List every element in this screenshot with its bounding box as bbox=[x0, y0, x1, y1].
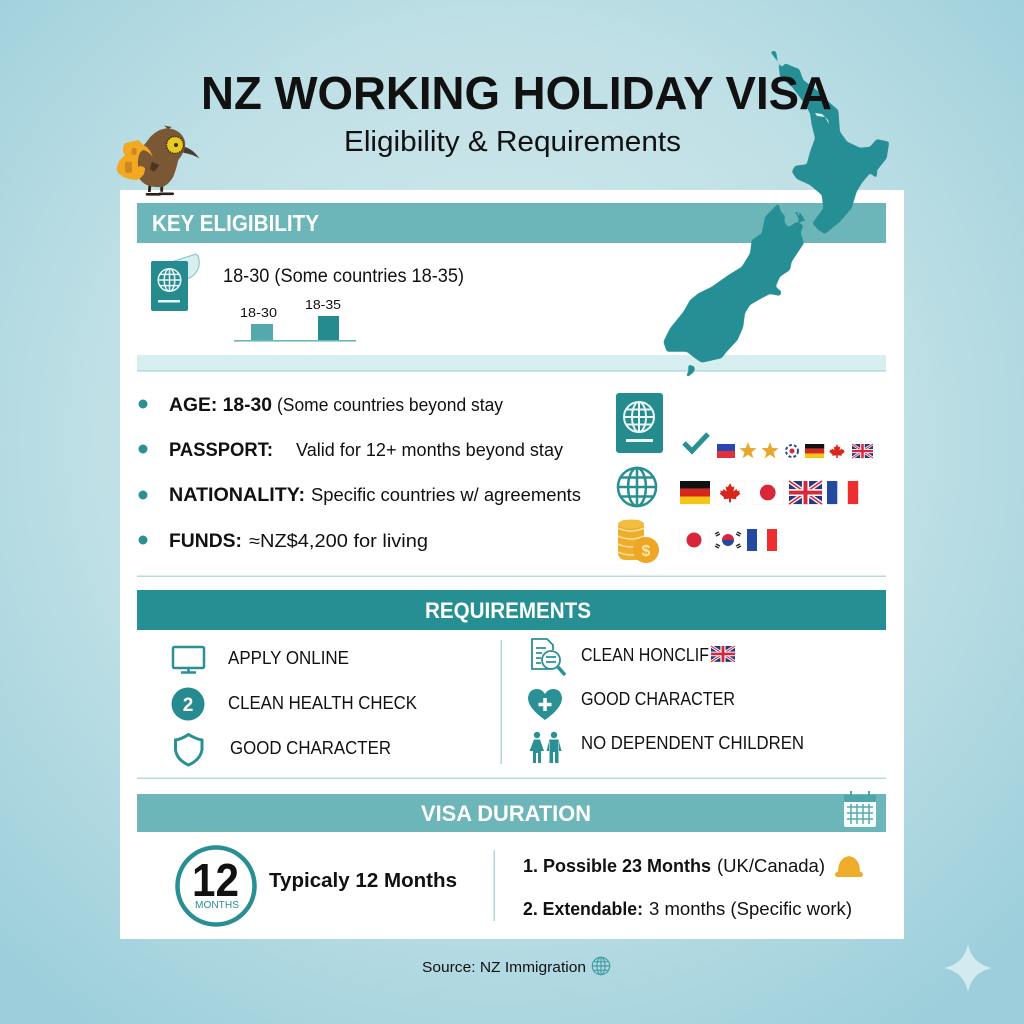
icon: hard hat bbox=[835, 856, 863, 877]
possible 23 months: 1. Possible 23 Months bbox=[523, 856, 711, 876]
flags row 1 bbox=[717, 442, 873, 458]
bullet: passport: Valid for 12+ months beyond stay bbox=[296, 440, 563, 460]
good character: GOOD CHARACTER bbox=[230, 738, 391, 758]
panel: eligibility list bbox=[138, 395, 581, 552]
icon: passport bbox=[616, 393, 663, 453]
extendable: 3 months (Specific work) bbox=[649, 899, 852, 919]
badge: 12 months: 12 bbox=[192, 854, 239, 906]
icon: people bbox=[530, 732, 562, 763]
bar chart: age ranges bbox=[234, 297, 356, 342]
bullet: age bbox=[138, 395, 503, 416]
vertical divider bbox=[494, 850, 495, 921]
typically 12 months: Typicaly 12 Months bbox=[269, 870, 457, 892]
subtitle: Eligibility & Requirements bbox=[344, 126, 681, 158]
bullet: nationality: Specific countries w/ agreements bbox=[311, 485, 581, 505]
flag: UK bbox=[711, 646, 735, 662]
divider bbox=[137, 778, 886, 779]
bullet: nationality: NATIONALITY: bbox=[169, 485, 305, 506]
icon: number 2: 2 bbox=[183, 695, 193, 716]
pale divider band bbox=[137, 355, 886, 371]
icon: coins bbox=[618, 520, 659, 563]
vertical divider bbox=[500, 640, 502, 764]
icon: check mark bbox=[684, 434, 708, 451]
badge: 12 months: MONTHS bbox=[195, 900, 239, 911]
icon: passport with ticket bbox=[151, 254, 199, 311]
age range text: 18-30 (Some countries 18-35) bbox=[223, 266, 464, 287]
map: New Zealand bbox=[663, 51, 889, 377]
source: Source: NZ Immigration bbox=[422, 959, 586, 976]
key eligibility heading: KEY ELIGIBILITY bbox=[152, 210, 319, 236]
bullet: nationality bbox=[138, 485, 581, 506]
flags row 3 bbox=[679, 529, 777, 551]
extendable bbox=[523, 899, 852, 919]
clean honclif: CLEAN HONCLIF bbox=[581, 645, 709, 665]
apply online: APPLY ONLINE bbox=[228, 648, 349, 668]
possible 23 months: (UK/Canada) bbox=[717, 856, 825, 876]
icon: shield bbox=[176, 734, 202, 765]
sparkle bbox=[944, 944, 992, 992]
visa duration header band bbox=[137, 794, 886, 832]
icon: monitor bbox=[173, 647, 204, 672]
bullet: age: (Some countries beyond stay bbox=[277, 395, 503, 415]
icon: coins: $ bbox=[642, 543, 651, 560]
icon: number 2 bbox=[172, 688, 204, 720]
requirements header band bbox=[137, 590, 886, 630]
title: NZ WORKING HOLIDAY VISA bbox=[201, 67, 832, 119]
bullet: passport: PASSPORT: bbox=[169, 440, 273, 461]
icon: heart with plus bbox=[528, 689, 562, 720]
no dependent children: NO DEPENDENT CHILDREN bbox=[581, 733, 804, 753]
icon: calendar bbox=[844, 791, 876, 827]
badge: 12 months bbox=[178, 848, 254, 924]
bullet: funds: FUNDS: bbox=[169, 531, 242, 552]
requirements heading: REQUIREMENTS bbox=[425, 598, 591, 623]
key eligibility header band bbox=[137, 203, 886, 243]
panel: key eligibility bbox=[137, 203, 886, 372]
icon: globe bbox=[618, 468, 656, 506]
bullet: funds bbox=[138, 531, 428, 552]
icon: source globe bbox=[592, 957, 610, 975]
visa duration heading: VISA DURATION bbox=[421, 801, 591, 826]
good character right: GOOD CHARACTER bbox=[581, 689, 735, 709]
bar chart: age ranges: 18-30 bbox=[240, 305, 277, 320]
extendable: 2. Extendable: bbox=[523, 899, 643, 919]
flags row 2 bbox=[680, 481, 858, 504]
bar chart: age ranges: 18-35 bbox=[305, 297, 341, 312]
bullet: funds: ≈NZ$4,200 for living bbox=[249, 531, 428, 551]
possible 23 months bbox=[523, 856, 825, 876]
panel: visa duration bbox=[137, 791, 886, 924]
bullet: age: AGE: 18-30 bbox=[169, 395, 272, 416]
icon: kiwi with backpack bbox=[117, 126, 199, 194]
panel: requirements bbox=[137, 590, 886, 765]
divider bbox=[137, 576, 886, 577]
bullet: passport bbox=[138, 440, 563, 461]
clean health check: CLEAN HEALTH CHECK bbox=[228, 693, 417, 713]
white card bbox=[120, 190, 904, 939]
icon: document with magnifier bbox=[532, 639, 565, 675]
